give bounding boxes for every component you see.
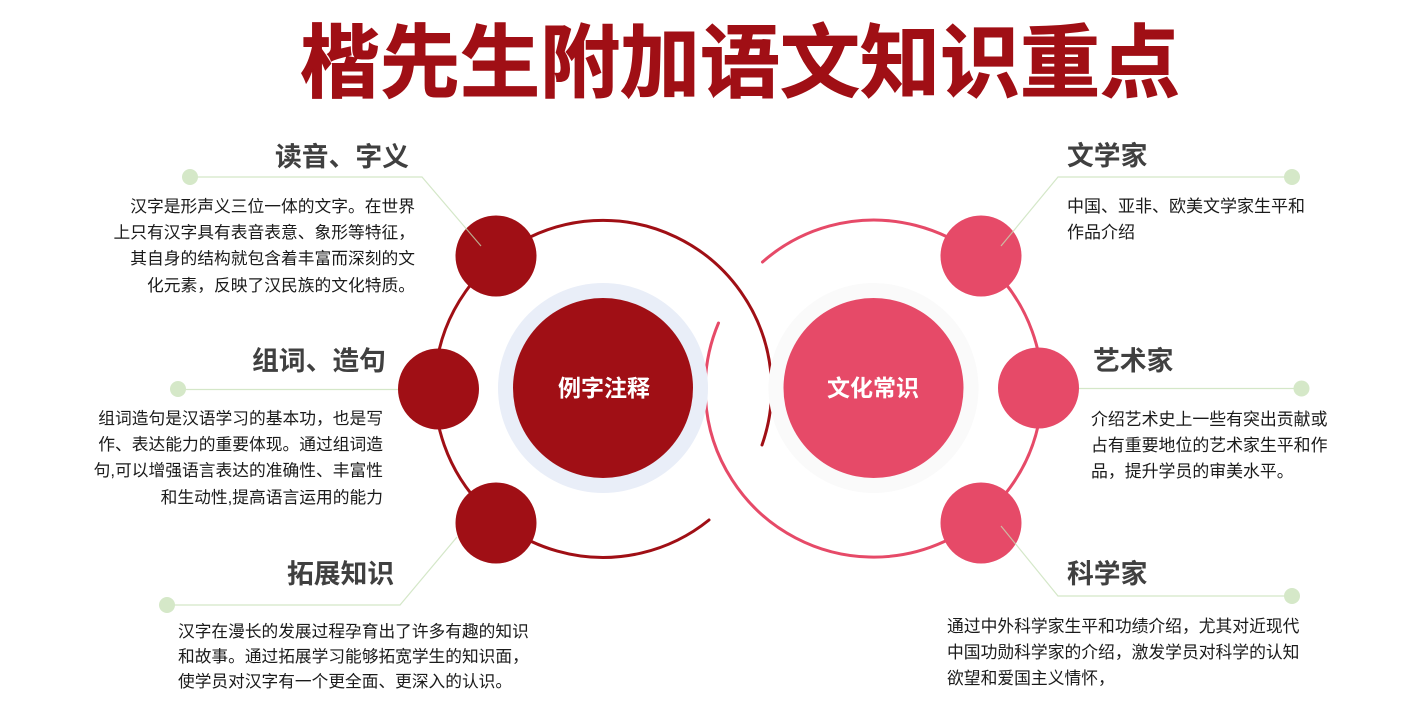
- heading: 文学家: 文学家: [1067, 141, 1147, 171]
- hub label: 文化常识: 文化常识: [827, 375, 919, 401]
- heading: 艺术家: 艺术家: [1093, 346, 1173, 376]
- left hub circle: [513, 298, 693, 478]
- hub label: 例字注释: 例字注释: [558, 375, 650, 401]
- leader: 读音、字义: [182, 169, 481, 246]
- right hub circle: [784, 298, 964, 478]
- text: 科学家: 通过中外科学家生平和功绩介绍，尤其对近现代 中国功勋科学家的介绍，激发学员对科学的认知 欲望和爱国主义情怀，: [947, 616, 1299, 688]
- text: 艺术家: 介绍艺术史上一些有突出贡献或 占有重要地位的艺术家生平和作 品，提升学员的审美水平。: [1091, 410, 1327, 481]
- text: 读音、字义: 汉字是形声义三位一体的文字。在世界 上只有汉字具有表音表意、象形等特征， 其自身的结构就包含着丰富而深刻的文 化元素，反映了汉民族的文化特质。: [113, 197, 415, 295]
- right ring arc: [705, 220, 1042, 557]
- text: 组词、造句: 组词造句是汉语学习的基本功，也是写 作、表达能力的重要体现。通过组词造 句,可以增强语言表达的准确性、丰富性 和生动性,提高语言运用的能力: [94, 409, 383, 507]
- left node: middle: [398, 348, 479, 430]
- leader: 文学家: [1001, 169, 1300, 246]
- right node: bottom: [940, 482, 1022, 564]
- right node: middle: [998, 348, 1079, 428]
- right node: top: [940, 216, 1022, 296]
- text: 文学家: 中国、亚非、欧美文学家生平和 作品介绍: [1067, 197, 1305, 242]
- text: 拓展知识: 汉字在漫长的发展过程孕育出了许多有趣的知识 和故事。通过拓展学习能够拓宽学生的知识面， 使学员对汉字有一个更全面、更深入的认识。: [178, 622, 529, 691]
- leader: 艺术家: [1079, 380, 1310, 396]
- left node: top: [456, 216, 536, 296]
- left node: bottom: [456, 482, 536, 564]
- heading: 拓展知识: 拓展知识: [287, 559, 394, 589]
- heading: 科学家: 科学家: [1067, 559, 1147, 589]
- heading: 组词、造句: 组词、造句: [252, 346, 386, 376]
- right hub halo: [768, 283, 978, 493]
- leader: 科学家: [1001, 526, 1300, 604]
- heading: 读音、字义: 读音、字义: [275, 142, 409, 172]
- left ring arc: [435, 220, 772, 557]
- leader: 组词、造句: [170, 381, 398, 397]
- leader: 拓展知识: [159, 537, 457, 613]
- left hub halo: [498, 283, 708, 493]
- title: 楷先生附加语文知识重点: [300, 19, 1180, 108]
